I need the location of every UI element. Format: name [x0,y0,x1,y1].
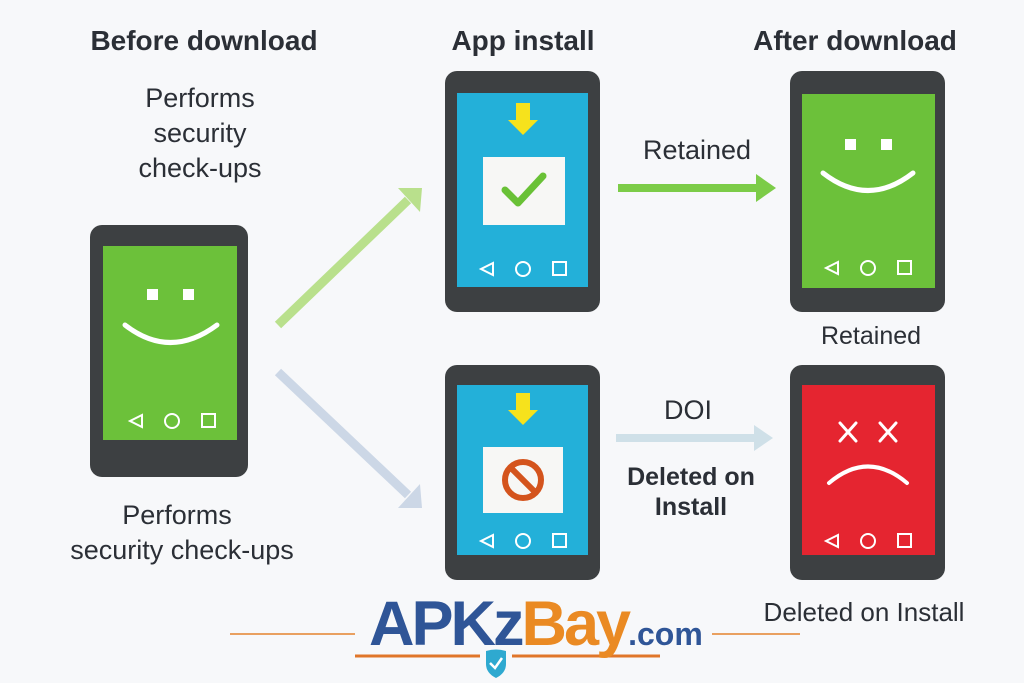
logo: APKzBay.com [230,589,800,678]
text: performs security check-ups bottom: Performs [122,500,232,530]
label: retained right: Retained [821,322,921,350]
heading: before download: Before download [90,25,318,56]
arrow: to app install top [278,188,422,325]
label: DOI: DOI [664,395,712,425]
label: deleted on install middle [627,463,755,521]
arrow: DOI [616,425,773,451]
text: performs security check-ups top: security [153,118,247,148]
arrow: retained [618,174,776,202]
text: performs security check-ups top: check-ups [138,153,262,183]
phone: left happy [90,225,248,477]
label: deleted on install right: Deleted on Install [764,597,964,627]
phone: after download happy [790,71,945,312]
text: performs security check-ups bottom [70,500,294,565]
label: retained top: Retained [643,135,751,165]
heading: app install: App install [451,25,595,56]
phone: app install success [445,71,600,312]
text: performs security check-ups top: Performs [145,83,255,113]
logo: APKzBay.com: APKzBay.com [369,589,703,659]
phone: after download deleted [790,365,945,580]
heading: after download: After download [753,25,957,56]
text: performs security check-ups top [138,83,262,183]
text: performs security check-ups bottom: security check-ups [70,535,294,565]
label: deleted on install middle: Install [655,493,727,521]
arrow: to app install bottom [278,372,422,508]
label: deleted on install middle: Deleted on [627,463,755,491]
phone: app install blocked [445,365,600,580]
